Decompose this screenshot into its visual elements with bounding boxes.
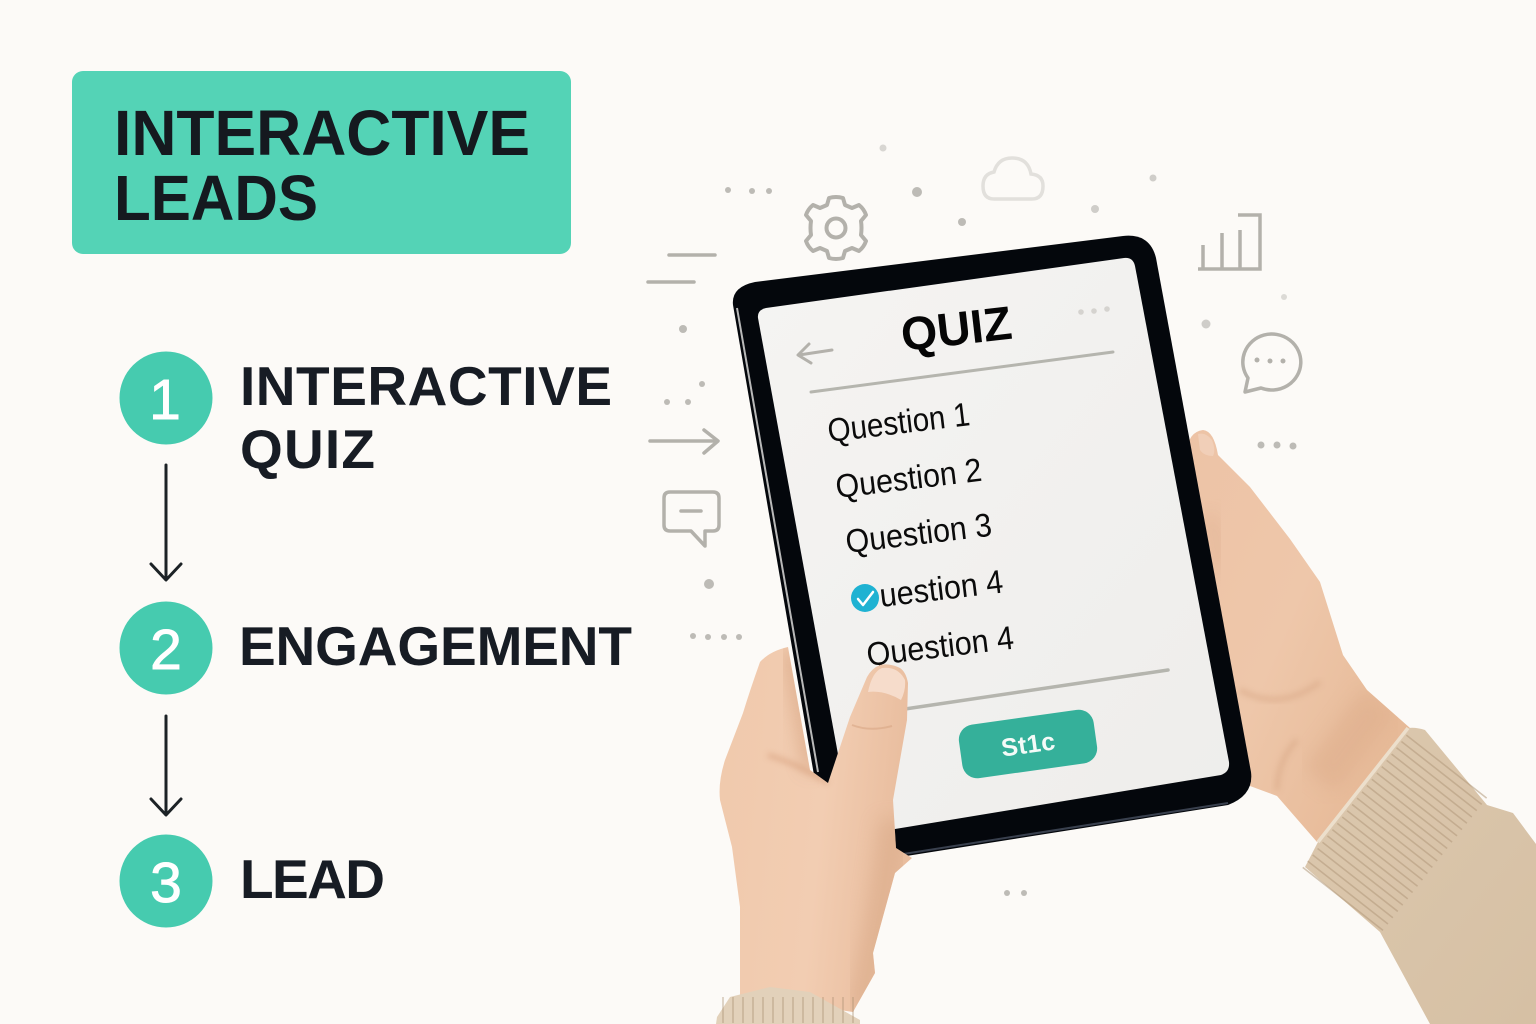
screen menu dots	[1078, 306, 1110, 315]
icon: menu lines	[648, 255, 715, 282]
icon: cloud	[983, 158, 1043, 199]
title banner: INTERACTIVE	[114, 97, 530, 169]
arrow: step 1 to step 2	[151, 465, 181, 580]
step 2: engagement	[120, 602, 632, 694]
right hand	[1187, 430, 1410, 842]
arrow: step 2 to step 3	[151, 716, 181, 815]
question list: Question 2	[833, 451, 984, 505]
title banner: LEADS	[114, 162, 318, 234]
step 2: engagement: ENGAGEMENT	[239, 615, 632, 677]
quiz heading: QUIZ	[898, 296, 1014, 361]
question list: Question 4	[864, 619, 1016, 673]
button	[957, 708, 1099, 780]
icon: gear	[806, 197, 866, 259]
right sleeve	[1305, 728, 1536, 1024]
question list: Question 3	[843, 506, 994, 560]
heading divider	[811, 352, 1113, 392]
back arrow	[798, 344, 832, 363]
tablet body	[733, 236, 1251, 868]
tablet screen	[758, 258, 1229, 836]
icon: right arrow	[650, 430, 718, 453]
decorative dots	[664, 144, 1296, 896]
bottom divider	[905, 670, 1168, 709]
icon: chat bubble right	[1243, 334, 1301, 392]
icon: chat bubble left	[664, 492, 719, 546]
step 1: interactive quiz	[120, 352, 612, 480]
tablet	[733, 236, 1251, 868]
question list: Question 1	[825, 395, 972, 449]
step 1: interactive quiz: QUIZ	[240, 418, 375, 480]
left hand	[720, 647, 912, 1012]
step 1: interactive quiz: 1	[149, 368, 181, 432]
button: St1c	[999, 727, 1057, 763]
question list	[825, 395, 1016, 673]
step 2: engagement: 2	[150, 618, 182, 682]
step 3: lead: 3	[150, 851, 182, 915]
icon: bar chart	[1198, 215, 1260, 269]
left sleeve	[716, 987, 860, 1024]
step 3: lead	[120, 834, 385, 928]
nail of left thumb	[868, 668, 905, 700]
title banner	[72, 71, 571, 254]
nail of right thumb	[1198, 434, 1214, 456]
step 1: interactive quiz: INTERACTIVE	[240, 355, 612, 417]
step 3: lead: LEAD	[240, 848, 385, 910]
question list: uestion 4	[877, 563, 1005, 614]
check mark	[851, 584, 879, 612]
